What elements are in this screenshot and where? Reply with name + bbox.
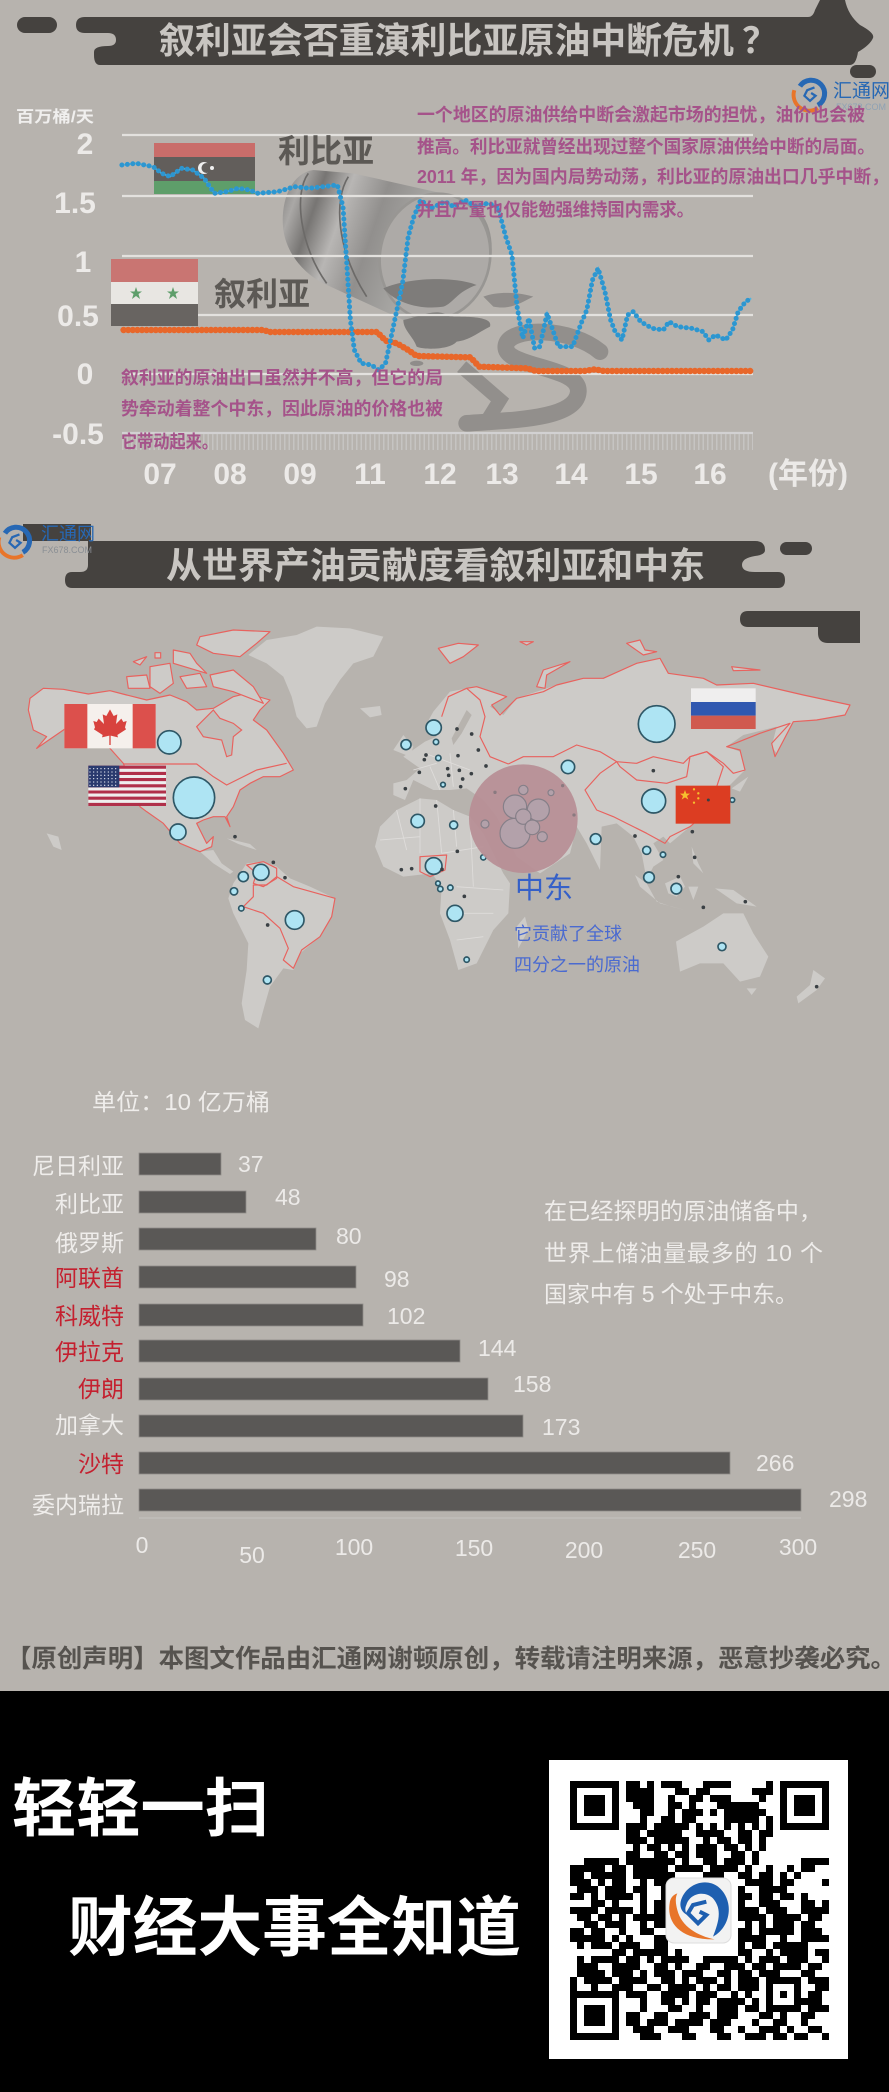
- callout: Middle East: 它贡献了全球: [514, 924, 622, 944]
- y axis labels: 0.5: [57, 300, 99, 333]
- x axis labels: 15: [624, 458, 658, 491]
- value labels: 102: [387, 1303, 425, 1329]
- panel: black footer with QR: [0, 1691, 889, 2092]
- callout: Middle East: [514, 872, 640, 975]
- illustration: oil barrel and dollar sign: [283, 170, 600, 427]
- panel: proven oil reserves bar chart: [6, 1089, 889, 1673]
- x axis labels: 13: [485, 458, 519, 491]
- icon: USA flag: [88, 766, 166, 806]
- text block: Libya explanation: 一个地区的原油供给中断会激起市场的担忧，油价也会被: [417, 104, 865, 125]
- chart grid lines: [122, 135, 753, 442]
- country labels: 阿联酋: [55, 1265, 124, 1291]
- text block: Syria explanation: 叙利亚的原油出口虽然并不高，但它的局: [121, 367, 443, 388]
- country labels: 伊朗: [78, 1376, 124, 1402]
- icon: site logo left: FX678.COM: [42, 545, 92, 555]
- x axis ticks and labels: 50: [239, 1542, 265, 1568]
- value labels: 37: [238, 1151, 264, 1177]
- x axis ticks and labels: 200: [565, 1537, 603, 1563]
- highlight: Middle East circle: [469, 764, 578, 873]
- copyright statement: 【原创声明】本图文作品由汇通网谢顿原创，转载请注明来源，恶意抄袭必究。: [6, 1644, 889, 1673]
- panel: Syria and Libya oil chart: [16, 0, 889, 491]
- heading banner: Syria Libya: 叙利亚会否重演利比亚原油中断危机: [159, 20, 734, 61]
- y axis labels: -0.5: [52, 418, 104, 451]
- x axis labels: 14: [554, 458, 588, 491]
- country labels: 伊拉克: [55, 1339, 124, 1365]
- x axis ticks and labels: 100: [335, 1534, 373, 1560]
- icon: Syria flag: [111, 259, 198, 326]
- text block: Libya explanation: [417, 104, 889, 220]
- label: Syria: 叙利亚: [214, 276, 310, 312]
- heading banner: world contribution: 从世界产油贡献度看叙利亚和中东: [166, 545, 705, 586]
- icon: site logo left: [0, 524, 95, 558]
- heading banner: Syria Libya: [17, 0, 876, 78]
- label: Libya: 利比亚: [278, 133, 374, 169]
- heading banner: Syria Libya: ？: [742, 20, 778, 61]
- country labels: 委内瑞拉: [32, 1492, 124, 1518]
- text block: Libya explanation: 推高。利比亚就曾经出现过整个国家原油供给中断的局面。: [417, 136, 875, 157]
- x axis ticks and labels: 0: [136, 1532, 148, 1558]
- country labels: 科威特: [55, 1303, 124, 1329]
- country labels: 尼日利亚: [32, 1153, 124, 1179]
- value labels: 48: [275, 1184, 301, 1210]
- value labels: 158: [513, 1371, 551, 1397]
- x axis labels: 12: [423, 458, 457, 491]
- text block: Libya explanation: 并且产量也仅能勉强维持国内需求。: [417, 199, 694, 220]
- heading banner: world contribution: [23, 524, 860, 643]
- icon: Canada flag: [64, 704, 156, 748]
- QR code: [549, 1760, 848, 2059]
- text block: Syria explanation: 势牵动着整个中东，因此原油的价格也被: [121, 398, 443, 419]
- country labels: 加拿大: [55, 1412, 124, 1438]
- map: Europe Africa Asia Oceania: [375, 640, 850, 1003]
- x axis ticks and labels: 250: [678, 1537, 716, 1563]
- x axis labels: 11: [354, 458, 386, 491]
- map: the Americas and Greenland: [28, 627, 383, 1028]
- y axis labels: [52, 128, 104, 451]
- y axis unit: 百万桶/天: [16, 107, 94, 126]
- icon: Russia flag: [691, 688, 756, 729]
- value labels: 144: [478, 1335, 517, 1361]
- panel: world oil contribution map: [0, 524, 860, 1028]
- slogan: 轻轻一扫: [12, 1773, 269, 1845]
- y axis labels: 0: [77, 358, 93, 391]
- y axis labels: 1.5: [54, 187, 96, 220]
- unit label: 单位：10 亿万桶: [92, 1089, 270, 1115]
- x axis ticks and labels: 300: [779, 1534, 817, 1560]
- icon: site logo top right: FX678.COM: [836, 102, 886, 112]
- icon: site logo left: 汇通网: [41, 524, 95, 544]
- text block: reserves note: 国家中有 5 个处于中东。: [544, 1281, 798, 1307]
- y axis labels: 2: [77, 128, 93, 161]
- value labels: 298: [829, 1486, 867, 1512]
- x axis labels: 09: [283, 458, 317, 491]
- icon: site logo top right: [794, 80, 889, 112]
- line: Libya oil exports: [122, 163, 751, 370]
- country labels: [32, 1153, 124, 1518]
- icon: Libya flag: [154, 143, 255, 194]
- x axis labels: 08: [213, 458, 247, 491]
- value labels: [238, 1151, 867, 1512]
- line: Syria oil exports: [124, 330, 751, 371]
- country labels: 沙特: [78, 1451, 124, 1477]
- text block: reserves note: 世界上储油量最多的 10 个: [544, 1240, 823, 1266]
- bubbles: Americas producers: [158, 731, 304, 984]
- x axis labels: (年份): [768, 458, 848, 491]
- value labels: 98: [384, 1266, 410, 1292]
- x axis ticks and labels: [136, 1518, 817, 1568]
- bars: [139, 1153, 801, 1511]
- callout: Middle East: 四分之一的原油: [514, 955, 640, 975]
- x axis labels: 16: [693, 458, 727, 491]
- country labels: 利比亚: [55, 1191, 124, 1217]
- value labels: 266: [756, 1450, 794, 1476]
- slogan: 财经大事全知道: [68, 1891, 521, 1964]
- text block: reserves note: [544, 1198, 823, 1307]
- text block: Syria explanation: [121, 367, 443, 452]
- value labels: 80: [336, 1223, 362, 1249]
- icon: site logo top right: 汇通网: [833, 80, 889, 102]
- icon: China flag: [676, 786, 730, 824]
- x axis ticks and labels: 150: [455, 1535, 493, 1561]
- bubbles: Europe Africa Asia producers: [401, 706, 817, 987]
- x axis labels: 07: [143, 458, 177, 491]
- value labels: 173: [542, 1414, 580, 1440]
- y axis labels: 1: [75, 246, 91, 279]
- icon: QR centre logo: [666, 1878, 731, 1943]
- text block: Libya explanation: 2011 年，因为国内局势动荡，利比亚的原油出口几乎中断，: [417, 166, 889, 187]
- slogan: [12, 1773, 521, 1964]
- text block: Syria explanation: 它带动起来。: [121, 431, 218, 452]
- country labels: 俄罗斯: [55, 1230, 124, 1256]
- text block: reserves note: 在已经探明的原油储备中，: [544, 1198, 822, 1224]
- x axis labels: [143, 458, 848, 491]
- callout: Middle East: 中东: [515, 872, 573, 905]
